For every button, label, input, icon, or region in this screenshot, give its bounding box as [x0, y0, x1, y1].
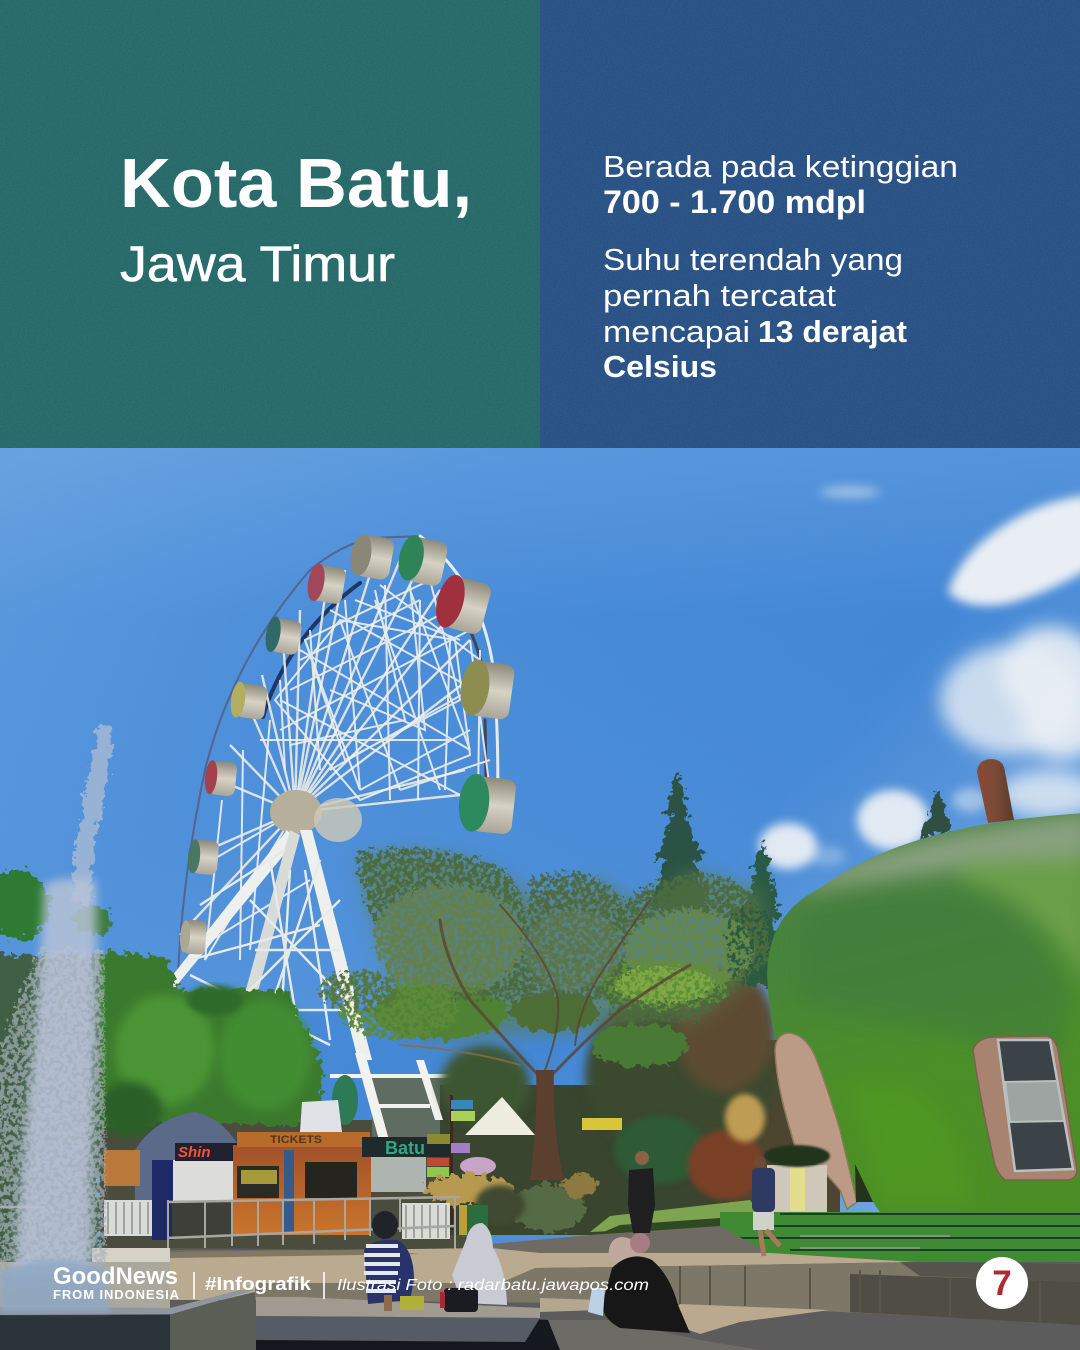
apple window — [973, 1036, 1077, 1180]
stone retaining wall — [255, 1262, 1080, 1325]
fact: lowest temperature: pernah tercatat — [603, 278, 836, 313]
pine trees — [650, 773, 953, 985]
food stall panel: Shin — [178, 1144, 210, 1161]
fact: altitude — [603, 149, 958, 220]
beige walk — [165, 1248, 915, 1300]
soft canopy underlay — [360, 853, 770, 1040]
wheel rim — [178, 536, 498, 975]
footer: photo credit: Ilustrasi Foto : radarbatu.jawapos.com — [337, 1277, 649, 1294]
fact: lowest temperature: Suhu terendah yang — [603, 242, 903, 277]
apple building — [767, 759, 1080, 1214]
fact: lowest temperature: 13 derajat — [758, 314, 907, 349]
tickets kiosk — [233, 1132, 426, 1235]
bushes and white planter by apple — [764, 1145, 830, 1213]
person: seated in black with hijab — [588, 1233, 690, 1333]
fact: lowest temperature: mencapai — [603, 314, 750, 349]
tickets kiosk: TICKETS — [270, 1134, 322, 1146]
apple door — [775, 1033, 873, 1209]
paved ground — [0, 1226, 915, 1310]
centre tree — [320, 848, 775, 1180]
planter — [92, 1248, 170, 1264]
fact: altitude: 700 - 1.700 mdpl — [603, 184, 866, 220]
fact: lowest temperature: Celsius — [603, 349, 717, 384]
footer: dividers — [194, 1272, 324, 1299]
fact: altitude: Berada pada ketinggian — [603, 149, 958, 184]
background foliage spots — [300, 1075, 765, 1200]
grey path — [492, 1226, 768, 1253]
person: seated in stripes — [364, 1211, 424, 1311]
person: standing man in black — [628, 1151, 655, 1233]
batu sign and direction signs — [362, 1095, 496, 1230]
subtitle: Jawa Timur: Jawa Timur — [120, 236, 395, 292]
fence — [0, 1197, 460, 1250]
footer: hashtag: #Infografik — [205, 1274, 312, 1294]
panel: facts — [540, 0, 1080, 448]
bins — [459, 1205, 488, 1237]
photo: Batu park with ferris wheel and apple building — [0, 448, 1080, 1350]
fountain — [0, 725, 112, 1312]
gondolas — [179, 532, 517, 955]
lawn and green steps — [580, 1200, 1080, 1266]
ferris wheel A-frame legs — [330, 1053, 450, 1137]
footer: logo — [53, 1263, 180, 1302]
background fairground backdrop — [100, 1040, 840, 1250]
clouds — [759, 486, 1080, 869]
solid lower canopy — [372, 903, 775, 1067]
page number badge — [976, 1257, 1028, 1309]
dark trees behind centre tree — [432, 963, 776, 1124]
lower floor — [520, 1298, 1080, 1350]
food stall panel — [104, 1143, 237, 1240]
sky — [0, 448, 1080, 1350]
airy upper canopy — [320, 848, 770, 1040]
person: man walking — [752, 1156, 780, 1256]
person: seated in white hijab — [440, 1223, 507, 1312]
bushes — [426, 1174, 598, 1232]
stem — [977, 759, 1014, 823]
trunk and branches — [400, 900, 690, 1180]
apple body — [767, 813, 1080, 1214]
page number badge: 7 — [992, 1264, 1012, 1303]
wheel hub and supports — [165, 790, 372, 1060]
apple shading — [800, 812, 1080, 1205]
panel: title — [0, 0, 540, 448]
visitors — [364, 1151, 780, 1333]
title: Kota Batu: Kota Batu, — [120, 144, 472, 222]
fountain spray speckle — [0, 950, 108, 1290]
tent — [135, 1112, 240, 1200]
left trees — [0, 870, 322, 1265]
wheel lattice — [195, 580, 490, 960]
ferris wheel — [165, 532, 517, 1060]
wheel spokes — [180, 560, 470, 935]
batu sign and direction signs: Batu — [385, 1138, 425, 1158]
footer: logo: FROM INDONESIA — [53, 1287, 180, 1302]
footer: logo: GoodNews — [53, 1263, 178, 1290]
fact: lowest temperature — [603, 242, 907, 384]
pond and concrete ledges — [0, 1290, 540, 1350]
ground base fill — [0, 1262, 1080, 1350]
panel grain texture — [0, 0, 1080, 448]
